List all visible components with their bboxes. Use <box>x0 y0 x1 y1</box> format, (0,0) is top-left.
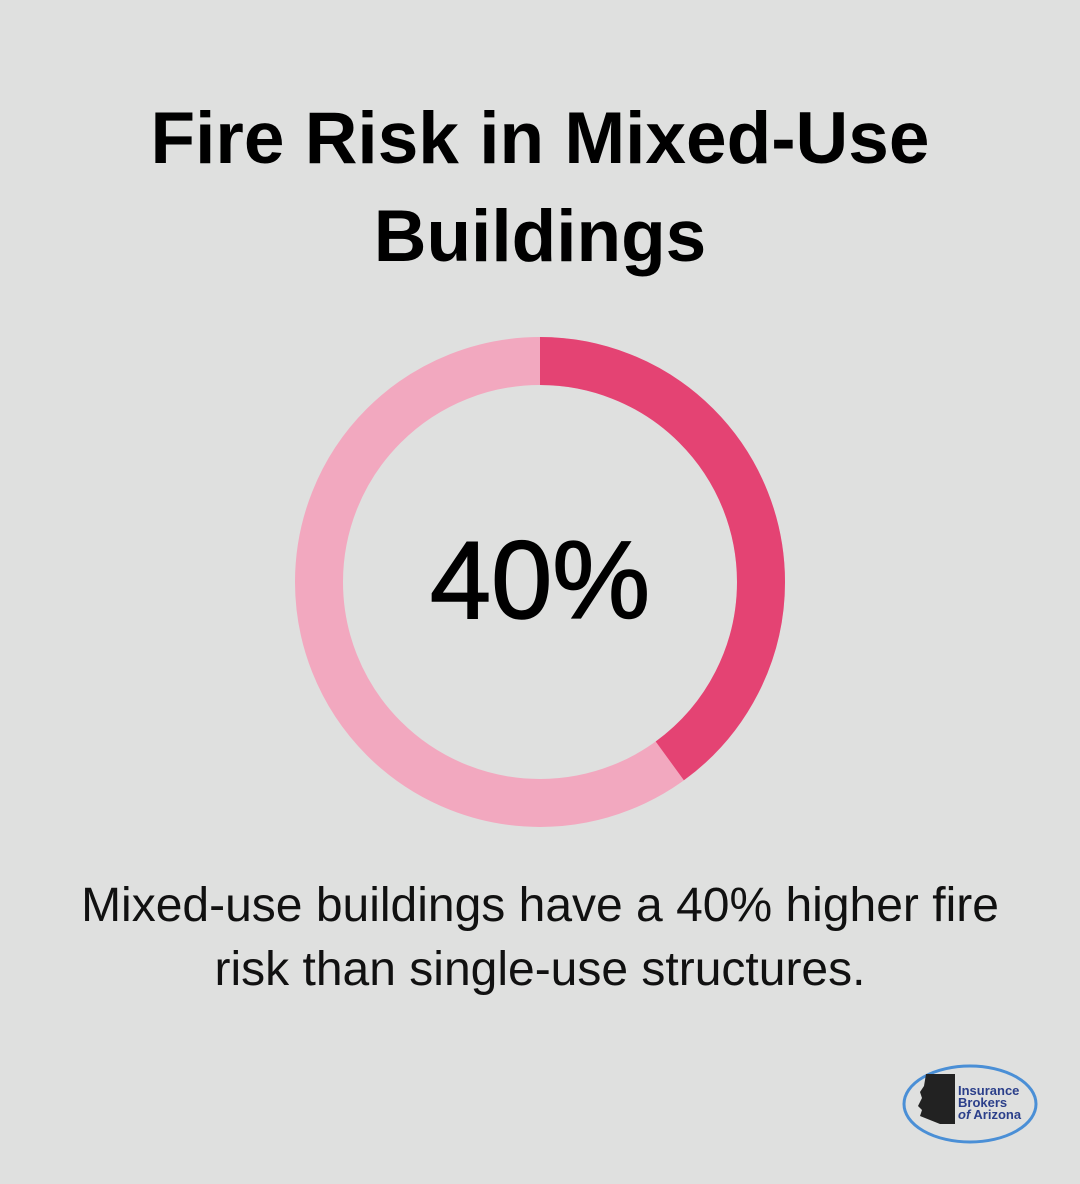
description text: risk than single-use structures. <box>215 943 865 996</box>
logo <box>902 1064 1038 1144</box>
logo: of Arizona <box>958 1107 1022 1122</box>
logo: Insurance <box>958 1083 1019 1098</box>
description text: Mixed-use buildings have a 40% higher fire <box>81 879 999 932</box>
title <box>151 98 929 277</box>
logo: Brokers <box>958 1095 1007 1110</box>
donut chart: 40% <box>430 519 650 642</box>
title: Buildings <box>374 196 706 277</box>
description text <box>81 879 999 996</box>
title: Fire Risk in Mixed-Use <box>151 98 929 179</box>
